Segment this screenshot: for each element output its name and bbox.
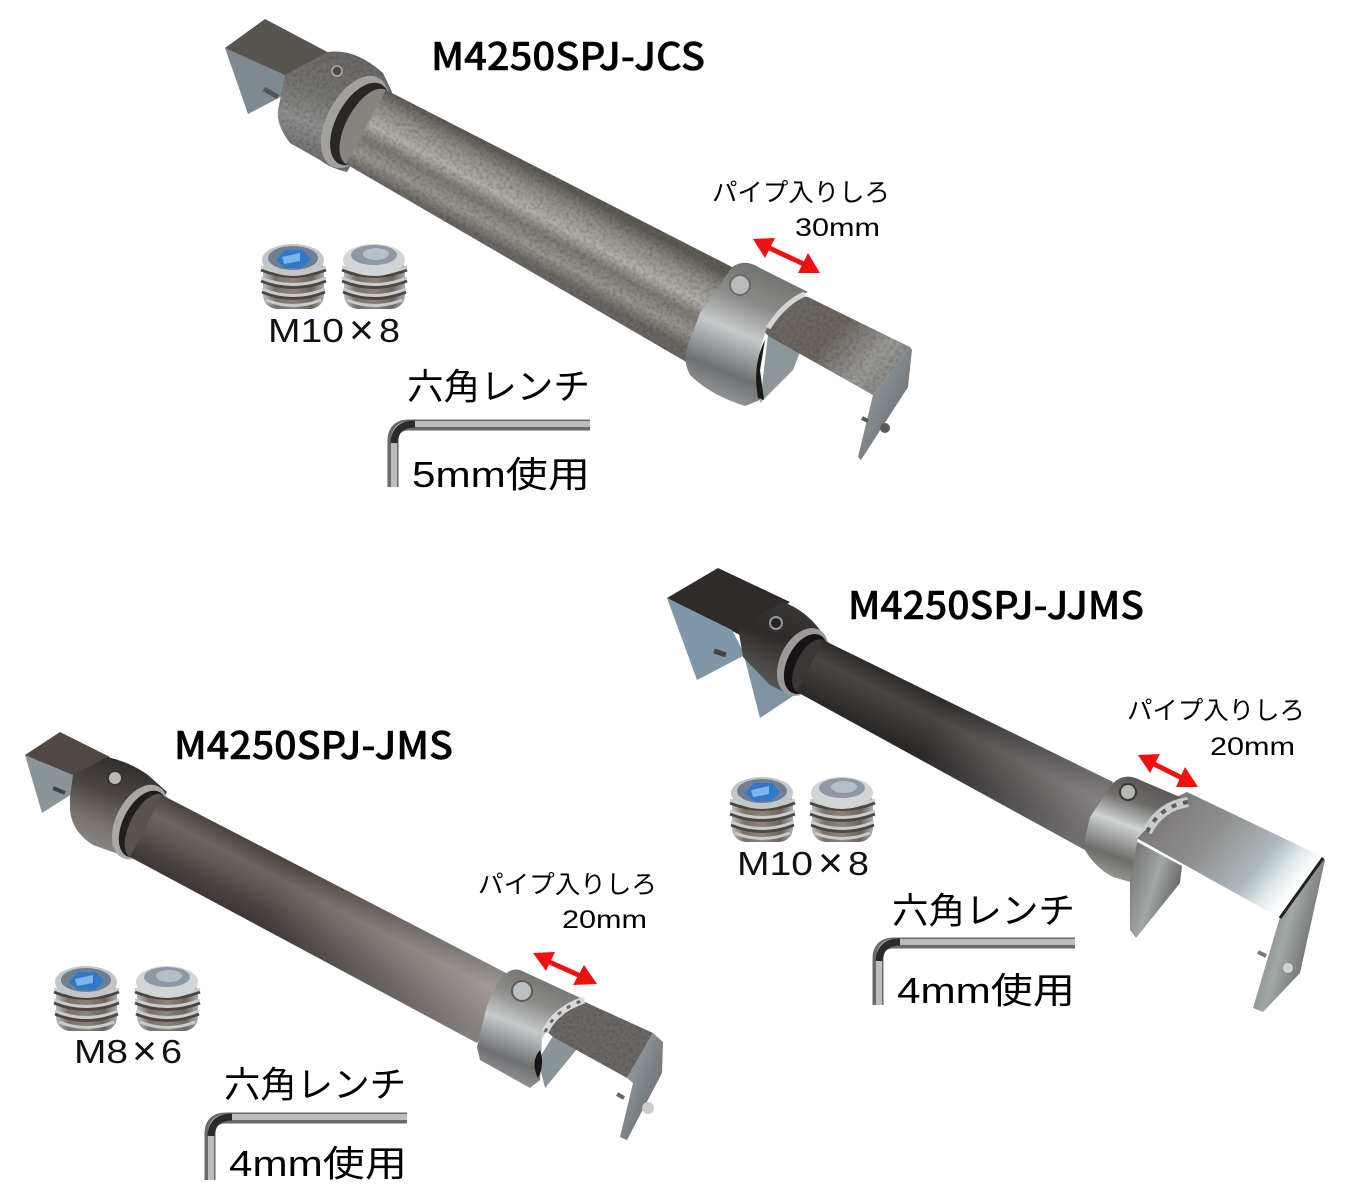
hex wrench 5mm: 六角レンチ [407,366,590,407]
bracket: left end [667,568,802,718]
set screws M8×6: × [132,1027,157,1074]
hex wrench 5mm [393,366,590,495]
hex wrench 5mm: 5mm使用 [412,454,590,495]
set screws M10×8: × [349,306,374,353]
hex wrench 4mm: 4mm使用 [897,970,1075,1011]
title: M4250SPJ-JCS: M4250SPJ-JCS [431,26,705,81]
hex wrench 4mm: 六角レンチ [892,890,1075,931]
arrow: insertion 20mm [533,952,597,985]
set screws M10×8: 8 [379,312,400,349]
collar: right with tube [1083,777,1325,1012]
label: pipe insertion margin: パイプ入りしろ [1127,697,1305,725]
collar: right with tube [477,970,663,1140]
product: M4250SPJ-JMS [25,715,663,1184]
title: M4250SPJ-JJMS: M4250SPJ-JJMS [848,575,1144,630]
collar: left [278,51,403,179]
product: M4250SPJ-JCS [225,19,912,495]
label: pipe insertion margin: 30mm [795,214,880,242]
arrow: insertion 30mm [753,238,820,273]
set screws M10×8: M10 [268,312,344,349]
set screws M8×6: M8 [74,1033,128,1070]
bracket: left end [225,19,335,114]
label: pipe insertion margin: 20mm [562,906,647,934]
label: pipe insertion margin: パイプ入りしろ [478,871,657,899]
collar: left [738,602,839,704]
label: pipe insertion margin [712,179,890,242]
pipe [329,81,732,370]
set screws M10×8: × [818,839,843,886]
arrow: insertion 20mm [1138,754,1198,787]
product: M4250SPJ-JJMS [667,568,1325,1012]
hex wrench 4mm: 4mm使用 [229,1143,407,1184]
pipe [785,634,1113,850]
collar: left [70,757,180,869]
set screws M10×8: M10 [737,845,813,882]
pipe [116,788,510,1043]
label: pipe insertion margin: パイプ入りしろ [712,179,890,207]
set screws M8×6 [54,966,200,1074]
label: pipe insertion margin [1127,697,1305,761]
hex wrench 4mm: 六角レンチ [224,1064,406,1105]
set screws M10×8: 8 [848,845,869,882]
hex wrench 4mm [210,1064,407,1184]
bracket: left end [25,732,110,813]
label: pipe insertion margin: 20mm [1210,733,1295,761]
set screws M10×8 [730,777,875,886]
collar: right with tube [685,263,912,460]
hex wrench 4mm [878,890,1075,1011]
title: M4250SPJ-JMS: M4250SPJ-JMS [174,715,453,770]
set screws M10×8 [261,244,407,353]
label: pipe insertion margin [478,871,657,934]
set screws M8×6: 6 [161,1033,182,1070]
